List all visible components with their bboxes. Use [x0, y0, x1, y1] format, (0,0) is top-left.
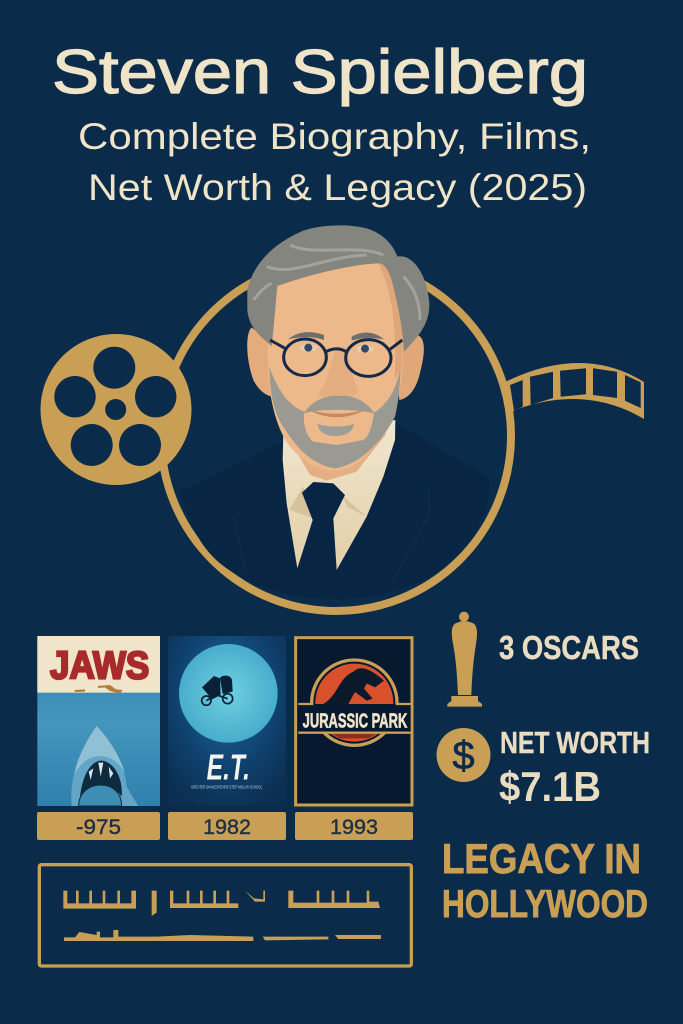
suit	[180, 423, 490, 599]
dinosaur	[323, 668, 384, 704]
year label: Jurassic Park	[295, 812, 413, 840]
shark	[71, 726, 138, 806]
poster background	[168, 636, 286, 806]
mouth	[308, 409, 367, 417]
logo disc	[312, 660, 397, 745]
portrait of Steven Spielberg	[180, 225, 490, 599]
year label: Jurassic Park: 1993	[330, 816, 378, 839]
E.T. heading: E.T.	[207, 746, 250, 787]
subtitle	[78, 116, 591, 208]
icon: Oscar statuette	[447, 612, 482, 707]
subtitle: Complete Biography, Films,	[78, 116, 591, 157]
portrait circle	[161, 261, 511, 611]
shirt	[283, 420, 395, 570]
eyebrows	[288, 332, 384, 341]
reel backing disc	[41, 334, 191, 484]
swimmer	[74, 685, 123, 693]
ears	[247, 327, 277, 397]
year label: Jaws	[37, 812, 160, 840]
face	[268, 258, 403, 470]
Jaws heading: JAWS	[50, 643, 149, 687]
Jurassic Park poster	[296, 638, 412, 805]
icon: dollar coin: $	[452, 734, 475, 778]
Jaws poster	[37, 636, 160, 806]
icon: dollar coin	[436, 728, 490, 782]
neck	[292, 433, 387, 481]
legacy heading	[442, 835, 648, 926]
beard	[269, 367, 401, 468]
film reel icon	[41, 334, 192, 485]
moon	[179, 644, 278, 743]
nose shading	[319, 347, 358, 399]
Oscars count: 3 OSCARS	[499, 629, 639, 666]
net worth label: NET WORTH	[500, 725, 650, 760]
garbled text panel	[39, 865, 411, 966]
year label: E.T.	[168, 812, 286, 840]
goatee	[317, 424, 354, 436]
collar shadow	[289, 487, 367, 518]
subtitle: Net Worth & Legacy (2025)	[88, 167, 587, 208]
banner	[298, 704, 411, 733]
poster frame	[296, 638, 412, 805]
title: Steven Spielberg	[52, 38, 588, 107]
film strip icon	[505, 363, 644, 419]
legacy heading: LEGACY IN	[442, 835, 641, 882]
hair	[247, 225, 429, 352]
poster background	[37, 636, 160, 806]
tagline: GREATER SHAKESPEARE STEP MOLAR SCHOOL	[191, 785, 263, 790]
net worth value: $7.1B	[499, 763, 601, 810]
eyes	[300, 344, 317, 352]
year label: E.T.: 1982	[203, 816, 251, 839]
glasses	[270, 339, 402, 376]
chin skin	[304, 410, 374, 445]
flying bicycle	[202, 676, 233, 705]
E.T. poster	[168, 636, 286, 806]
Jurassic Park heading: JURASSIC PARK	[303, 711, 408, 733]
year label: Jaws: -975	[76, 816, 121, 839]
tie	[297, 482, 345, 597]
